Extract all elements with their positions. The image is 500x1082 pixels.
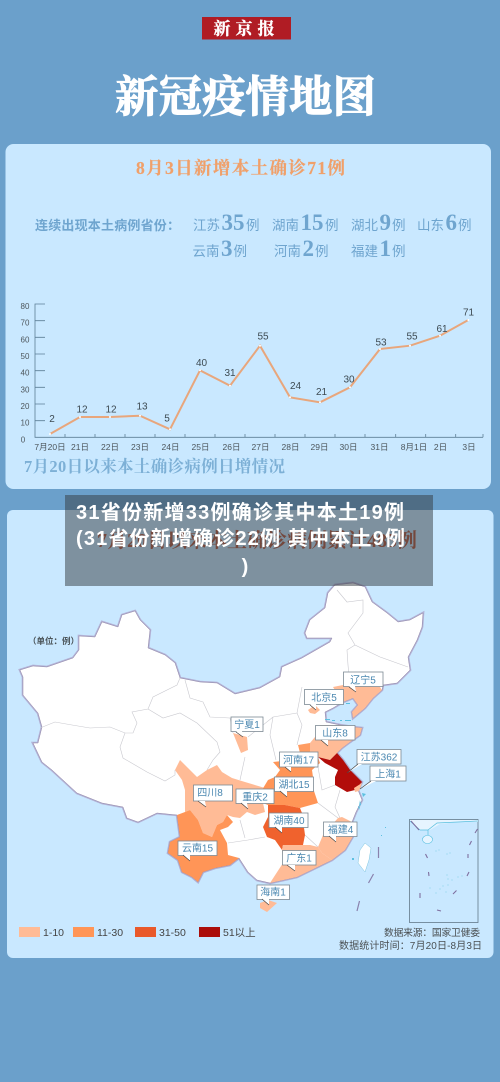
line chart: daily local cases: 7月20日 [34,442,66,452]
legend [19,927,256,939]
label: Ningxia [231,717,263,737]
line chart: daily local cases: 40 [21,369,30,378]
label: Yunnan [178,841,217,861]
label: Henan: 河南17 [283,754,314,766]
region: Fujian [318,817,355,860]
label: Jiangsu: 江苏362 [361,750,398,764]
region: Liaoning [333,685,382,718]
region: Hunan [263,805,305,850]
overlay: headline banner: (31省份新增确诊22例 其中本土9例 [76,527,405,550]
label: Yunnan: 云南15 [182,842,213,854]
region: Yunnan [168,810,239,882]
label: Hubei [274,777,314,797]
label: Shandong: 山东8 [322,726,348,740]
region: Jiangsu [318,753,362,792]
line chart: daily local cases: 31日 [371,442,388,452]
region: Guangdong [270,845,332,883]
line chart: daily local cases: 70 [21,319,30,328]
line chart: daily local cases: 10 [21,419,30,428]
logo: Beijing News masthead: 新京报 [214,18,280,38]
label: Hubei: 湖北15 [278,779,310,791]
label: Guangdong [282,850,316,871]
overlay: headline banner: 31省份新增33例确诊其中本土19例 [76,501,404,524]
line chart: daily local cases: 28日 [282,442,299,452]
text block: provinces with local cases: 连续出现本土病例省份： [35,218,180,233]
line chart: daily local cases: 8月1日 [401,442,427,452]
label: Hainan: 海南1 [260,886,286,898]
label: Liaoning: 辽宁5 [350,674,376,686]
line chart: daily local cases: 24日 [162,442,179,452]
line chart: daily local cases: 0 [21,435,26,444]
label: Hainan [257,885,290,905]
line chart: daily local cases: 24 [290,381,301,392]
region: Sichuan and Chongqing [175,760,265,837]
line chart: daily local cases: 55 [257,331,269,342]
heading: new local cases: 8月3日新增本土确诊71例 [136,158,345,178]
line chart: daily local cases: 30日 [340,442,357,452]
text block: data source: 数据统计时间：7月20日-8月3日 [339,939,482,952]
label: Chongqing [236,789,274,809]
line chart: daily local cases: 2 [49,414,55,425]
line chart: daily local cases: 55 [406,331,418,342]
label: Beijing [304,690,344,710]
nine-dash line [357,847,378,911]
heading: chart caption: 7月20日以来本土确诊病例日增情况 [24,456,286,476]
line chart: daily local cases: 20 [21,402,30,411]
line chart: daily local cases: 21 [316,387,327,398]
line chart: daily local cases: 50 [21,352,30,361]
line chart: daily local cases: 53 [375,338,387,349]
region: Hubei [260,777,318,808]
line chart: daily local cases: 12 [76,405,88,416]
label: Sichuan [194,785,232,807]
map: China [20,583,423,912]
label: Ningxia: 宁夏1 [234,718,260,731]
line chart: daily local cases: 21日 [71,442,89,452]
region: Ningxia [233,733,248,753]
line chart: daily local cases: 22日 [101,442,119,452]
region: Henan [273,757,320,777]
logo: Beijing News masthead [202,17,291,40]
text block: provinces with local cases: 福建1例 [351,236,406,261]
label: Hunan: 湖南40 [273,814,305,827]
line chart: daily local cases: 12 [105,405,117,416]
line chart: daily local cases: 2日 [434,442,447,452]
line chart: daily local cases: 23日 [131,442,149,452]
text block: provinces with local cases: 湖南15例 [272,210,338,235]
label: Sichuan: 四川8 [197,788,223,799]
line chart: daily local cases: 71 [463,308,474,319]
line chart: daily local cases: 13 [136,402,148,413]
line chart: daily local cases: 60 [21,335,30,344]
label: Chongqing: 重庆2 [242,790,268,804]
text block: provinces with local cases: 湖北9例 [351,210,406,235]
label: Shandong [316,726,355,746]
text block: data source [339,926,482,952]
panel: map [7,510,494,958]
text block: provinces with local cases: 河南2例 [274,236,328,261]
region: Shandong [310,725,362,760]
text block: provinces with local cases: 江苏35例 [193,210,260,235]
label: Shanghai: 上海1 [375,768,401,780]
text block: provinces with local cases: 山东6例 [417,210,472,235]
legend: 51以上 [223,927,256,939]
text: unit: （单位：例） [28,636,79,646]
legend: 31-50 [159,927,186,939]
panel: daily trend [6,144,491,489]
line chart: daily local cases: 40 [196,358,207,369]
line chart: daily local cases: 26日 [223,442,240,452]
label: Fujian [324,822,357,842]
region: Shanghai [354,783,362,792]
legend: 11-30 [97,927,123,939]
label: Henan [280,752,318,772]
text block: provinces with local cases: 云南3例 [192,236,247,261]
line chart: daily local cases: 61 [436,324,448,335]
coastal islands [325,703,386,860]
label: Guangdong: 广东1 [286,852,312,864]
line chart: daily local cases: 80 [21,302,30,311]
line chart: daily local cases: 25日 [192,442,209,452]
region: Hainan [260,900,277,912]
label: Fujian: 福建4 [328,823,354,836]
heading: cumulative cases behind overlay: 7月20日以来本土确诊病例累计485例 [97,528,417,552]
line chart: daily local cases: 3日 [462,442,476,452]
label: Beijing: 北京5 [311,691,337,704]
label: Shanghai [360,766,406,789]
label: Hunan [269,813,308,833]
region: Taiwan [358,843,371,872]
province borders [40,590,408,847]
overlay: headline banner: ) [242,556,248,578]
line chart: daily local cases [21,302,483,452]
text block: data source: 数据来源：国家卫健委 [384,926,480,939]
line chart: daily local cases: 30 [21,385,30,394]
title: 新冠疫情地图 [115,74,376,122]
text block: provinces with local cases [35,210,472,261]
region: Beijing [308,705,320,714]
line chart: daily local cases: 5 [164,414,170,425]
line chart: daily local cases: 31 [224,368,236,379]
overlay: headline banner [65,495,433,586]
line chart: daily local cases: 29日 [311,442,328,452]
line chart: daily local cases: 27日 [252,442,269,452]
legend: 1-10 [43,927,64,939]
label: Liaoning [344,672,383,692]
inset map: South China Sea [410,820,478,922]
line chart: daily local cases: 30 [343,374,355,385]
label: Jiangsu [347,750,401,773]
